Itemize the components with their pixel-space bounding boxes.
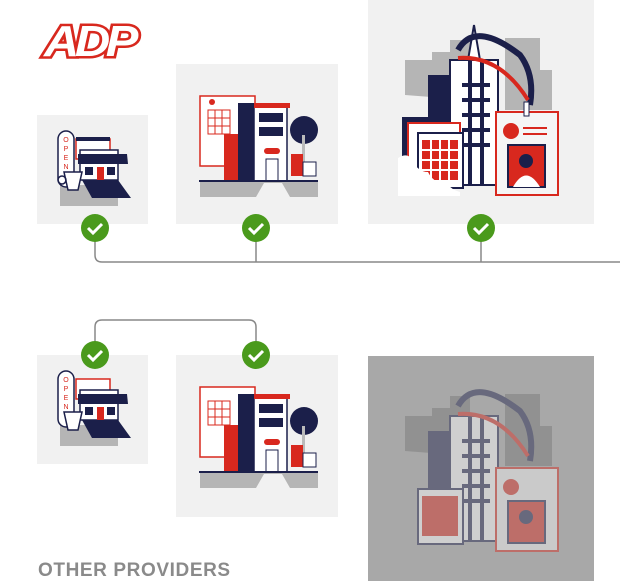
logo: ADP: ADP <box>43 17 139 66</box>
panel: mid business (ADP) <box>176 64 338 224</box>
panel: small business (other): P <box>64 386 69 393</box>
panel: enterprise (ADP) <box>368 0 594 224</box>
panel: small business (other): N <box>63 404 69 411</box>
panel: small business (other): E <box>64 395 69 402</box>
icon: check 1 <box>81 214 109 242</box>
panel: small business (ADP): N <box>63 164 69 171</box>
icon: check 5 <box>242 341 270 369</box>
icon: check 2 <box>242 214 270 242</box>
panel: small business (other): O <box>63 377 69 384</box>
panel: small business (other) <box>37 355 148 464</box>
icon: check 3 <box>467 214 495 242</box>
icon: check 4 <box>81 341 109 369</box>
label: other providers: OTHER PROVIDERS <box>38 560 231 581</box>
panel: mid business (other) <box>176 355 338 517</box>
logo: ADP: ADP <box>43 17 139 66</box>
panel: small business (ADP): O <box>63 137 69 144</box>
panel: small business (ADP) <box>37 115 148 224</box>
panel: small business (ADP): P <box>64 146 69 153</box>
panel: small business (ADP): E <box>64 155 69 162</box>
panel: enterprise (other, greyed) <box>368 356 594 581</box>
connector lines <box>95 240 620 343</box>
